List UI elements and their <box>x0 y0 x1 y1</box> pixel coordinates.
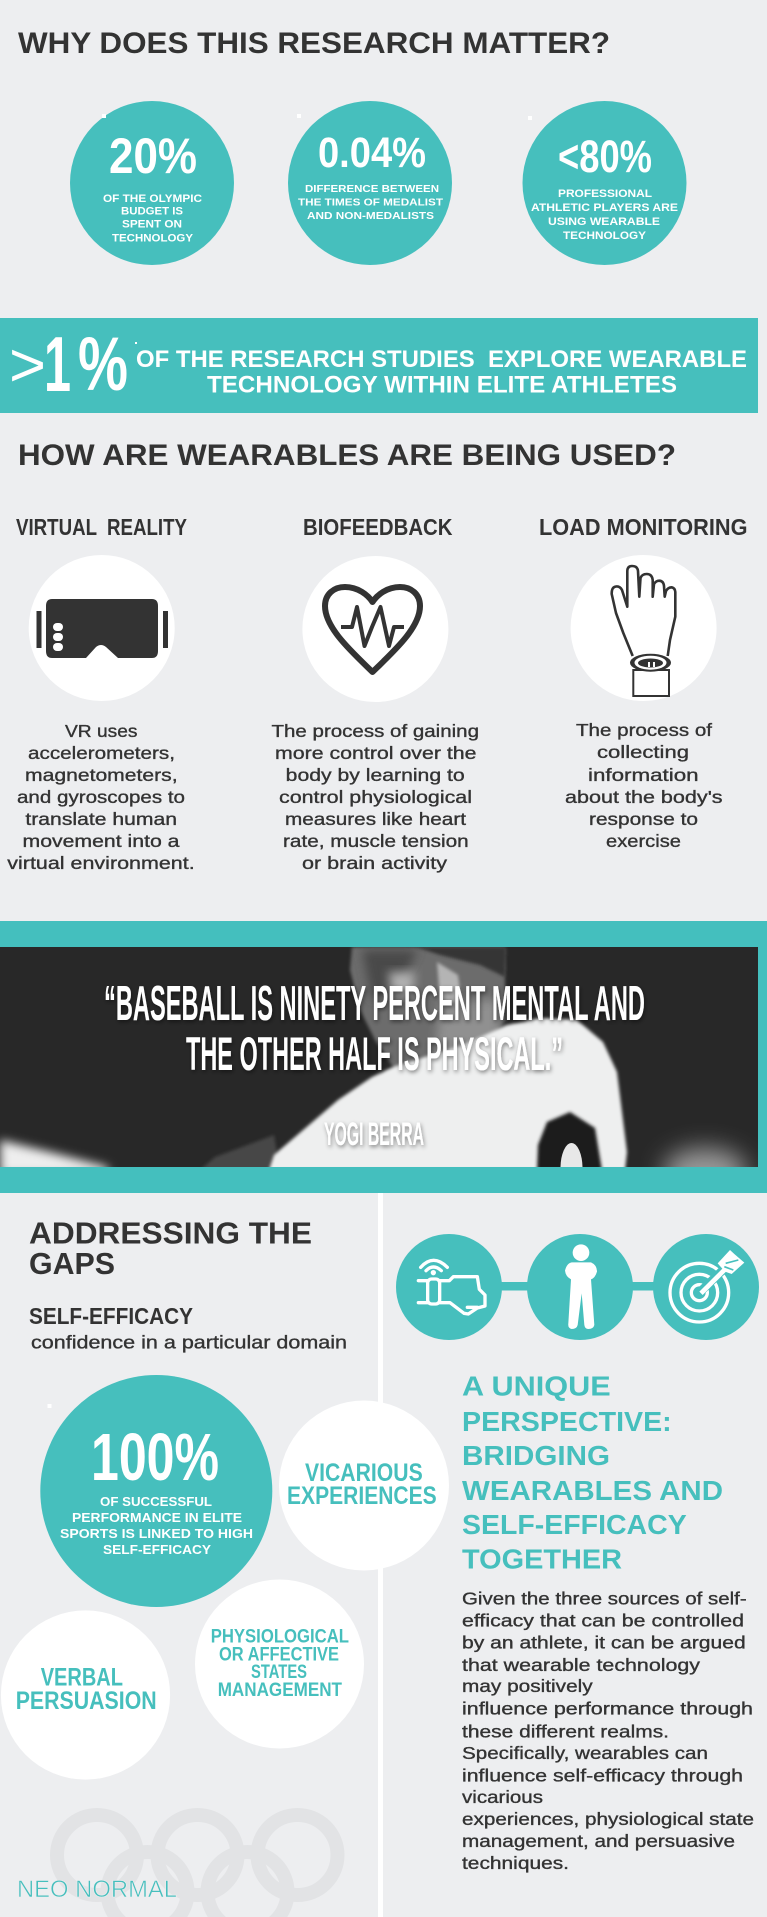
description: translate human <box>25 809 177 829</box>
quote panel: teal band <box>0 921 767 1196</box>
description: virtual environment. <box>7 853 195 873</box>
definition: self-efficacy: SELF-EFFICACY <box>29 1303 193 1329</box>
source circle: physiological or affective states management: STATES <box>251 1662 307 1683</box>
icon: heart with pulse <box>302 556 448 702</box>
description: information <box>588 765 699 785</box>
heading: a unique perspective: PERSPECTIVE: <box>462 1406 672 1437</box>
stat circle: 0.04% <box>288 101 452 265</box>
stat circle: 20%: 20% <box>109 128 197 184</box>
body text: unique perspective: by an athlete, it can be argued <box>462 1632 746 1652</box>
stat circle: <80%: <80% <box>558 131 652 182</box>
banner: under 1 percent of studies: OF THE RESEARCH STUDIES EXPLORE WEARABLE <box>136 346 747 373</box>
source circle: vicarious experiences: VICARIOUS <box>305 1459 423 1487</box>
stat circle: <80%: USING WEARABLE <box>548 216 660 228</box>
stat circle: <80% <box>522 101 686 265</box>
stat circle: 0.04%: DIFFERENCE BETWEEN <box>305 183 439 195</box>
heading: a unique perspective: SELF-EFFICACY <box>462 1509 687 1540</box>
description: or brain activity <box>302 853 447 873</box>
body text: unique perspective: experiences, physiological state <box>462 1809 754 1829</box>
description: rate, muscle tension <box>283 831 469 851</box>
description: exercise <box>606 831 681 851</box>
icon chain: wearable, athlete, target <box>396 1234 759 1340</box>
stat circle: <80%: ATHLETIC PLAYERS ARE <box>531 202 678 214</box>
olympic rings watermark <box>57 1815 338 1917</box>
stat circle: <80%: TECHNOLOGY <box>563 230 647 242</box>
heading: addressing the gaps: ADDRESSING THE <box>29 1216 312 1250</box>
heading: a unique perspective: BRIDGING <box>462 1440 610 1471</box>
banner: under 1 percent of studies: 1 <box>44 320 71 408</box>
definition: self-efficacy <box>29 1303 347 1352</box>
heading: addressing the gaps: GAPS <box>29 1246 115 1281</box>
stat circle: 0.04%: THE TIMES OF MEDALIST <box>298 196 444 208</box>
banner: under 1 percent of studies: % <box>78 322 128 407</box>
stat circle: 100%: SELF-EFFICACY <box>103 1543 212 1557</box>
column heading: LOAD MONITORING <box>539 514 748 540</box>
description: control physiological <box>279 787 472 807</box>
description: measures like heart <box>285 809 466 829</box>
quote text: YOGI BERRA <box>324 1116 424 1152</box>
source circle: verbal persuasion: VERBAL <box>41 1664 123 1692</box>
icon: wrist with wearable <box>418 1260 485 1314</box>
stat circle: 100%: PERFORMANCE IN ELITE <box>72 1511 242 1525</box>
body text: unique perspective: Given the three sources of self- <box>462 1589 747 1609</box>
definition: self-efficacy: confidence in a particular domain <box>31 1332 347 1352</box>
stat circle: 0.04%: 0.04% <box>318 129 426 177</box>
description: movement into a <box>22 831 180 851</box>
column heading: BIOFEEDBACK <box>303 514 453 540</box>
photo: baseball player <box>0 947 758 1167</box>
quote text <box>104 977 645 1152</box>
icon: standing athlete <box>565 1244 597 1329</box>
body text: unique perspective: influence self-efficacy through <box>462 1766 743 1786</box>
description: more control over the <box>275 743 476 763</box>
body text: unique perspective: techniques. <box>462 1853 569 1873</box>
description: VR uses <box>65 721 138 741</box>
body text: unique perspective: vicarious <box>462 1787 543 1807</box>
description: The process of gaining <box>272 721 479 741</box>
banner: under 1 percent of studies: TECHNOLOGY WITHIN ELITE ATHLETES <box>207 372 677 398</box>
stat circle: 0.04%: AND NON-MEDALISTS <box>307 210 434 222</box>
description: and gyroscopes to <box>17 787 185 807</box>
description: magnetometers, <box>25 765 178 785</box>
description: accelerometers, <box>28 743 175 763</box>
source circle: vicarious experiences: EXPERIENCES <box>287 1482 437 1510</box>
stat circle: <80%: PROFESSIONAL <box>558 188 652 200</box>
description <box>565 720 723 851</box>
stat circle: 20%: BUDGET IS <box>121 206 183 218</box>
stat circle: 100%: SPORTS IS LINKED TO HIGH <box>60 1527 253 1541</box>
vertical divider <box>378 1193 383 1917</box>
source circle: physiological or affective states management: OR AFFECTIVE <box>219 1644 339 1666</box>
stat circle: 100% <box>40 1375 272 1607</box>
source circle: physiological or affective states management: MANAGEMENT <box>218 1680 342 1701</box>
description: about the body's <box>565 787 723 807</box>
heading: a unique perspective: WEARABLES AND <box>462 1475 723 1506</box>
source circle: physiological or affective states management <box>195 1580 364 1748</box>
title: why does this research matter: WHY DOES THIS RESEARCH MATTER? <box>18 27 610 60</box>
description: body by learning to <box>286 765 465 785</box>
body text: unique perspective: Specifically, wearables can <box>462 1743 708 1763</box>
stat circle: 20%: OF THE OLYMPIC <box>103 193 202 205</box>
icon: target with arrow <box>670 1250 744 1322</box>
heading: a unique perspective <box>462 1371 723 1574</box>
body text: unique perspective: management, and persuasive <box>462 1831 735 1851</box>
column: load monitoring <box>539 514 748 851</box>
body text: unique perspective: influence performance through <box>462 1698 753 1718</box>
column heading: VIRTUAL REALITY <box>16 514 187 540</box>
description <box>272 721 479 873</box>
heading: a unique perspective: A UNIQUE <box>462 1371 611 1402</box>
source circle: physiological or affective states management: PHYSIOLOGICAL <box>211 1626 349 1648</box>
body text: unique perspective: that wearable technology <box>462 1655 700 1675</box>
icon: hand with wrist band <box>571 555 717 701</box>
description: response to <box>589 809 698 829</box>
source circle: verbal persuasion: PERSUASION <box>16 1687 157 1715</box>
description: The process of <box>576 720 712 740</box>
column: virtual reality <box>7 514 195 873</box>
body text: unique perspective: efficacy that can be controlled <box>462 1611 744 1631</box>
stat circle: 100%: 100% <box>91 1420 219 1495</box>
heading: addressing the gaps <box>29 1216 312 1281</box>
label: neo normal: NEO NORMAL <box>17 1876 177 1903</box>
stat circle: 20%: SPENT ON <box>122 218 182 230</box>
source circle: vicarious experiences <box>279 1400 449 1570</box>
body text: unique perspective: these different realms. <box>462 1721 669 1741</box>
banner: under 1 percent of studies: > <box>9 331 46 400</box>
column: biofeedback <box>272 514 479 873</box>
heading: a unique perspective: TOGETHER <box>462 1544 622 1574</box>
body text: unique perspective: may positively <box>462 1676 593 1696</box>
heading: how are wearables being used: HOW ARE WEARABLES ARE BEING USED? <box>18 439 676 472</box>
stat circle: 100%: OF SUCCESSFUL <box>100 1495 212 1509</box>
body text: unique perspective <box>462 1589 754 1873</box>
banner: under 1 percent of studies <box>0 318 758 413</box>
source circle: verbal persuasion <box>1 1610 170 1780</box>
description: collecting <box>597 742 689 762</box>
icon: VR headset <box>29 555 175 701</box>
stat circle: 20% <box>70 101 234 265</box>
stat circle: 20%: TECHNOLOGY <box>112 232 194 244</box>
description <box>7 721 195 873</box>
